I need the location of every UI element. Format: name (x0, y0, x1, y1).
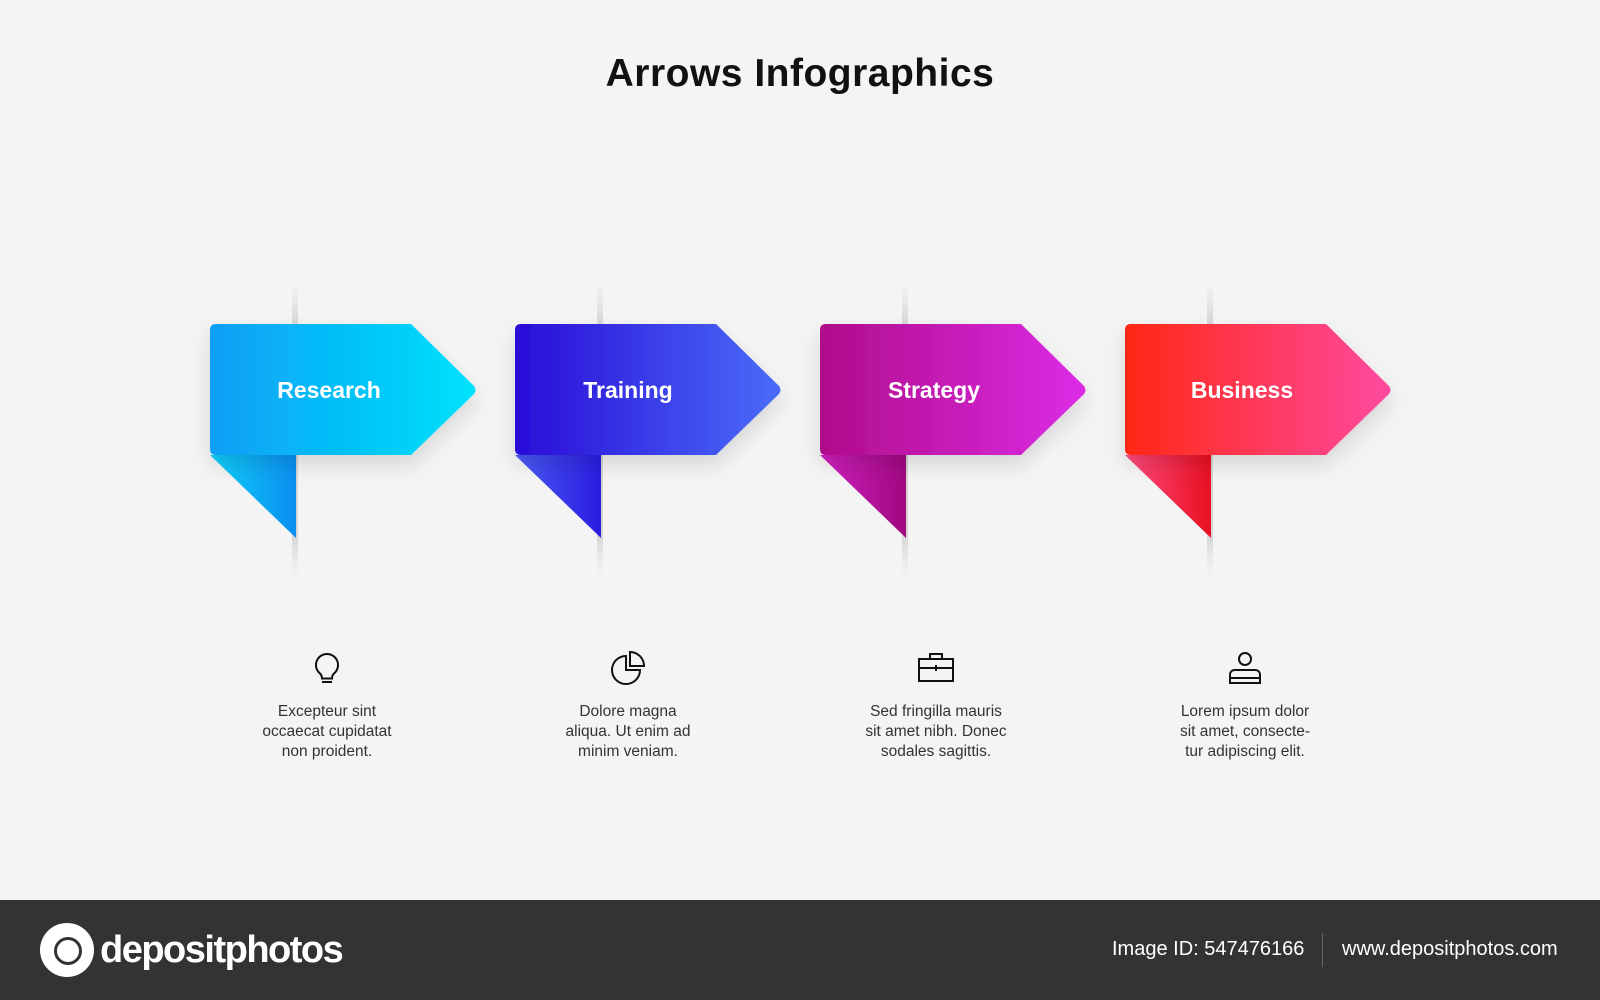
text: Strategy description: sit amet nibh. Donec (865, 723, 1007, 740)
website: www.depositphotos.com (1342, 938, 1558, 960)
icon: briefcase (918, 653, 954, 682)
arrow: Training: Training (583, 377, 673, 403)
logo: depositphotos (100, 928, 342, 970)
text: Training description: Dolore magna (579, 703, 677, 720)
icon: pie chart (611, 651, 645, 685)
arrow: Training (515, 282, 780, 577)
text: Research description: non proident. (282, 743, 372, 760)
icon: user (1229, 652, 1261, 684)
arrow: Research: Research (277, 377, 381, 403)
footer bar (0, 900, 1600, 1000)
text: Training description: minim veniam. (578, 743, 678, 760)
text: Strategy description: Sed fringilla mauris (870, 703, 1002, 720)
title: Arrows Infographics (606, 52, 994, 95)
arrow: Business (1125, 282, 1390, 577)
text: Business description (1180, 703, 1310, 760)
text: Strategy description: sodales sagittis. (881, 743, 991, 760)
text: Research description: Excepteur sint (278, 703, 376, 720)
text: Business description: sit amet, consecte- (1180, 723, 1310, 740)
arrow: Research (210, 282, 476, 577)
text: Business description: Lorem ipsum dolor (1181, 703, 1309, 720)
image id: Image ID: 547476166 (1112, 938, 1304, 960)
arrow: Strategy (820, 282, 1086, 577)
logo (40, 923, 342, 977)
text: Training description (566, 703, 690, 760)
text: Training description: aliqua. Ut enim ad (566, 723, 690, 740)
arrow: Business: Business (1191, 377, 1293, 403)
text: Research description: occaecat cupidatat (262, 723, 392, 740)
arrow: Strategy: Strategy (888, 377, 980, 403)
text: Business description: tur adipiscing elit. (1185, 743, 1305, 760)
text: Strategy description (865, 703, 1007, 760)
icon: lightbulb (315, 653, 339, 683)
text: Research description (262, 703, 392, 760)
